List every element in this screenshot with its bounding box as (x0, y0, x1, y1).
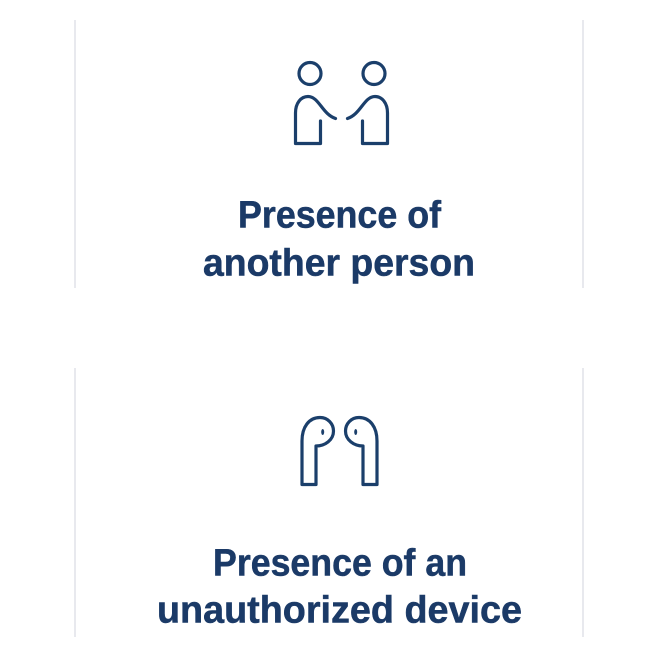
heading: Presence of another person: Presence of (238, 194, 441, 236)
heading: Presence of an unauthorized device (157, 542, 522, 632)
heading: Presence of an unauthorized device: Presence of an (213, 542, 467, 584)
panel: presence of an unauthorized device (157, 418, 522, 632)
heading: Presence of another person (203, 194, 475, 284)
icon: wireless earbuds (302, 418, 377, 484)
panel: presence of another person (203, 62, 475, 284)
icon: two people shaking hands (296, 62, 388, 144)
heading: Presence of an unauthorized device: unauthorized device (157, 590, 522, 632)
heading: Presence of another person: another person (203, 242, 475, 284)
